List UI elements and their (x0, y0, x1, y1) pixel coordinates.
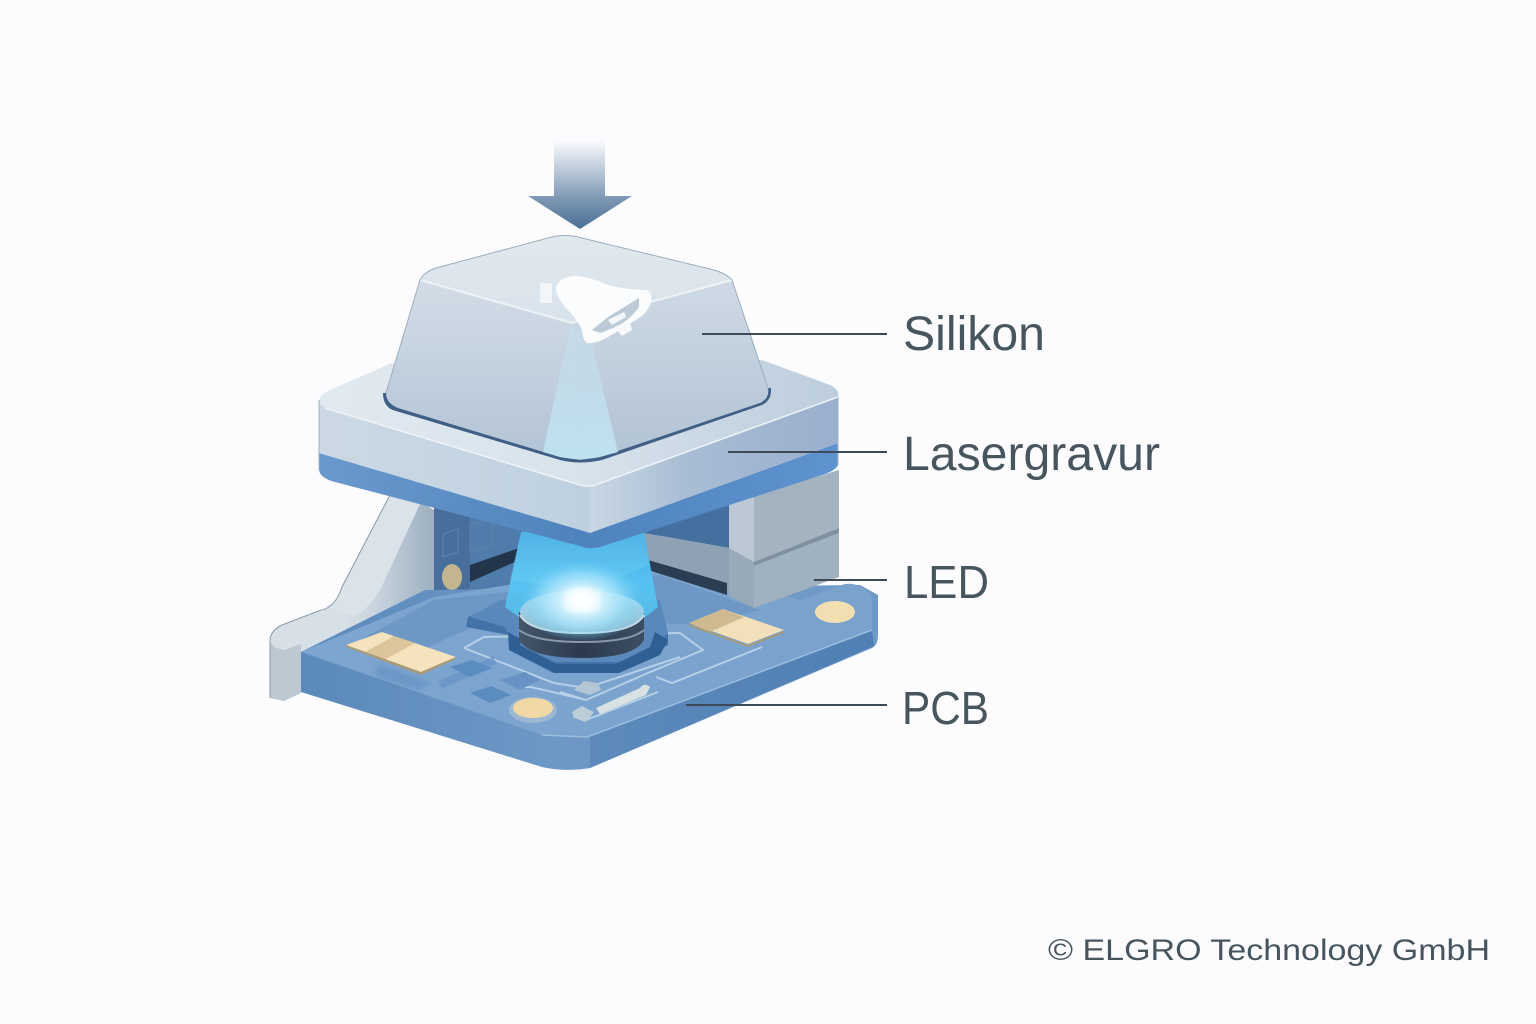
icon: left gold pad (346, 632, 456, 690)
leader line: PCB (686, 704, 887, 706)
label: Silikon: Silikon (903, 308, 1045, 361)
back wall behind the LED (434, 503, 729, 600)
label: LED: LED (904, 556, 989, 608)
icon: laser-engraved bell (540, 276, 652, 343)
left face (386, 280, 580, 460)
arrow: press direction (528, 140, 632, 229)
right stacked spacer blocks (470, 470, 839, 608)
leader line: Lasergravur (728, 451, 887, 453)
LED component (519, 561, 644, 658)
panel: silicone keycap (383, 236, 771, 462)
light beam from LED (505, 532, 658, 625)
right face (572, 280, 768, 460)
icon: gold contact on wall (442, 564, 462, 590)
label: PCB: PCB (902, 682, 989, 734)
sub-element: small components on traces (574, 681, 601, 695)
panel: bezel flange (319, 360, 838, 548)
label: Lasergravur: Lasergravur (903, 428, 1160, 481)
top face (420, 236, 732, 324)
leader line: LED (814, 579, 887, 581)
light column on keycap (543, 327, 618, 459)
leader line: Silikon (702, 333, 887, 335)
circuit traces (464, 633, 762, 720)
icon: right gold pad (689, 609, 784, 647)
LED recess (466, 590, 668, 673)
copyright notice: © ELGRO Technology GmbH (1048, 934, 1490, 967)
bracket: left side support (270, 493, 434, 701)
slot right (648, 560, 727, 595)
icon: front gold via (509, 697, 557, 723)
slot left (470, 548, 519, 582)
icon: right gold via (815, 601, 855, 623)
panel: PCB board (301, 560, 878, 770)
